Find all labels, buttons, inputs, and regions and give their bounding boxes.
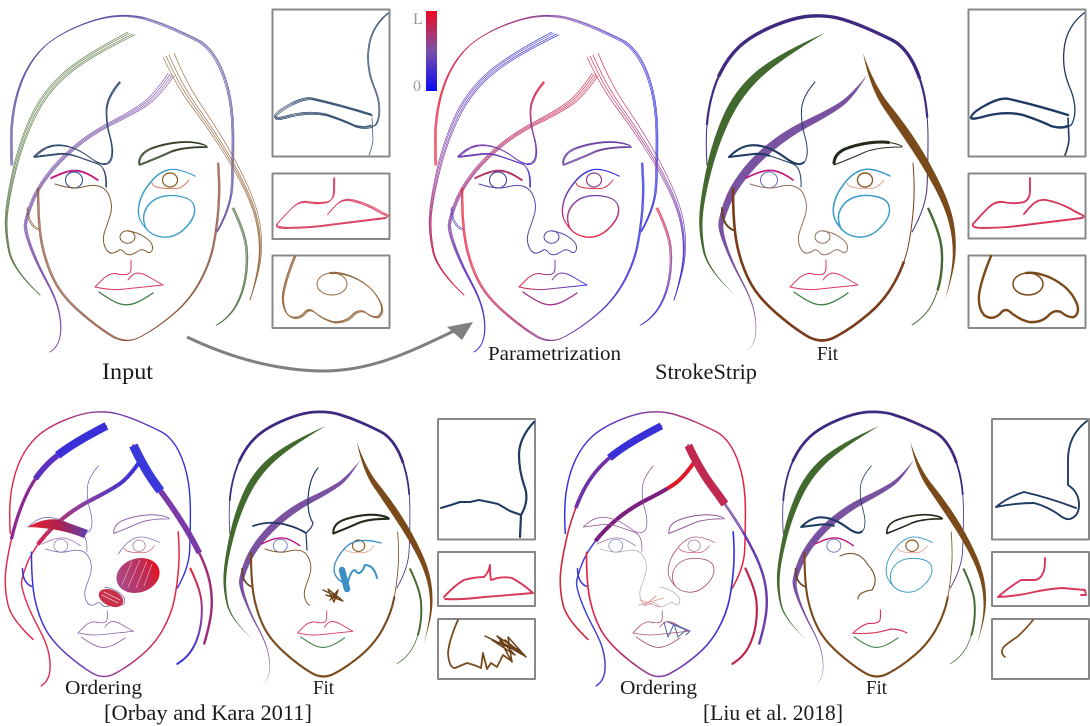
colour bar legend <box>413 11 437 95</box>
inset panel: input lips <box>272 174 390 239</box>
panel: input sketch face <box>4 15 270 353</box>
label: StrokeStrip: StrokeStrip <box>655 359 757 384</box>
label: Fit: Fit <box>313 677 334 699</box>
inset panel: input nose <box>272 255 390 328</box>
inset panel: Orbay brow <box>438 419 535 540</box>
inset panel: fit brow <box>968 10 1086 156</box>
panel: StrokeStrip fit face <box>699 16 956 352</box>
inset panel: Orbay lips <box>438 552 535 606</box>
label: Orbay and Kara 2011: [Orbay and Kara 2011] <box>104 700 312 725</box>
label: Ordering: Ordering <box>65 677 142 699</box>
inset panel: fit nose <box>968 256 1086 328</box>
inset panel: Liu lips <box>992 552 1089 606</box>
label: Liu et al. 2018: [Liu et al. 2018] <box>703 700 843 725</box>
panel: Liu et al. fit face <box>777 412 986 686</box>
colour bar legend: L <box>413 11 423 28</box>
inset panel: Orbay nose <box>438 619 535 679</box>
inset panel: Liu brow <box>992 419 1089 540</box>
inset panel: Liu nose <box>992 619 1089 679</box>
panel: Orbay and Kara ordering face <box>5 412 212 686</box>
panel: parametrization face <box>428 15 694 353</box>
inset panel: fit lips <box>968 174 1086 238</box>
panel: Orbay and Kara fit face <box>223 412 433 686</box>
label: Ordering: Ordering <box>620 677 697 699</box>
colour bar legend: 0 <box>413 78 421 95</box>
arrow: input to StrokeStrip <box>187 322 473 371</box>
label: Parametrization: Parametrization <box>488 343 621 365</box>
label: Fit: Fit <box>866 677 887 699</box>
inset panel: input brow <box>272 10 390 156</box>
panel: Liu et al. ordering face <box>560 412 767 686</box>
label: Fit: Fit <box>817 343 838 365</box>
label: Input: Input <box>102 359 154 384</box>
